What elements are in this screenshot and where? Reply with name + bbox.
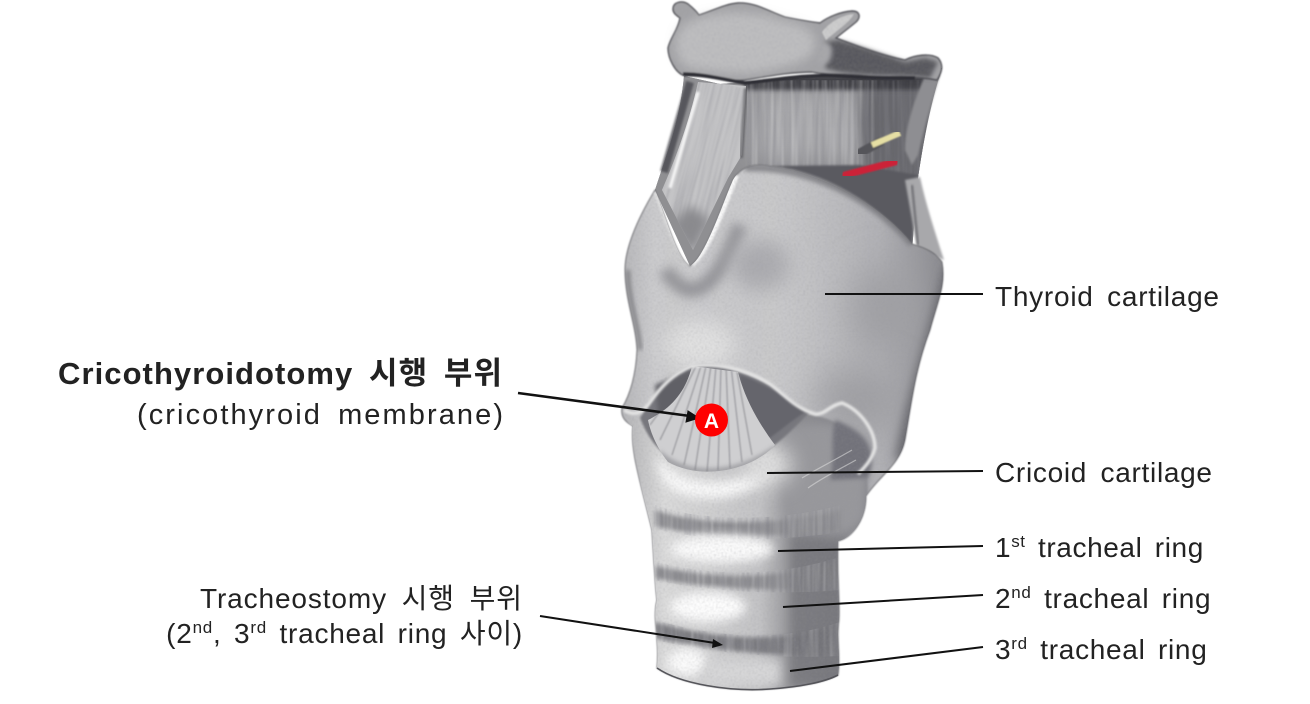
tracheal bands — [655, 510, 840, 536]
leader: 3rd tracheal ring — [790, 647, 983, 671]
leader: cricoid cartilage — [767, 471, 983, 473]
label: cricothyroidotomy site: Cricothyroidotomy 시행 부위 — [58, 356, 502, 391]
label: thyroid cartilage: Thyroid cartilage — [995, 281, 1219, 312]
thyroid notch rim — [691, 175, 736, 264]
label: cricoid cartilage: Cricoid cartilage — [995, 457, 1212, 488]
tracheal ring highlights — [670, 535, 774, 563]
cricothyroid membrane — [624, 360, 875, 488]
leader: 1st tracheal ring — [778, 546, 983, 551]
leader: 2nd tracheal ring — [783, 595, 983, 607]
label: between 2nd and 3rd tracheal rings: rd — [250, 618, 267, 637]
marker A: A — [704, 410, 719, 433]
label: 2nd tracheal ring: tracheal ring — [1032, 583, 1211, 614]
thyroid shading — [844, 269, 893, 348]
label: between 2nd and 3rd tracheal rings: tracheal ring 사이) — [267, 618, 523, 649]
label: 1st tracheal ring: tracheal ring — [1026, 532, 1204, 563]
leader: thyroid cartilage — [825, 293, 983, 295]
label: between 2nd and 3rd tracheal rings: nd — [193, 618, 213, 637]
arrow: to tracheostomy site — [540, 616, 723, 648]
label: between 2nd and 3rd tracheal rings: (2 — [166, 618, 193, 649]
icon: yellow nerve — [860, 133, 900, 153]
label: 3rd tracheal ring: rd — [1011, 634, 1028, 653]
label: 2nd tracheal ring: nd — [1011, 583, 1032, 602]
label: 1st tracheal ring: st — [1011, 532, 1026, 551]
right ligament and muscle strip — [905, 75, 940, 165]
label: 1st tracheal ring: 1 — [995, 532, 1011, 563]
thyroid lower rim — [624, 365, 875, 474]
icon: red artery — [845, 162, 895, 175]
upper thyrohyoid membrane — [655, 68, 945, 266]
cricoid highlight — [655, 455, 775, 499]
body: thyroid, cricoid, trachea — [620, 160, 960, 700]
label: 2nd tracheal ring: 2 — [995, 583, 1011, 614]
illustration: larynx and trachea — [620, 0, 960, 700]
arrow: to marker A — [518, 393, 699, 422]
label: tracheostomy site: Tracheostomy 시행 부위 — [200, 583, 522, 614]
label: cricothyroid membrane: (cricothyroid membrane) — [137, 399, 503, 431]
marker A — [695, 404, 728, 436]
hyoid bone — [668, 0, 943, 83]
label: 3rd tracheal ring: 3 — [995, 634, 1011, 665]
label: 3rd tracheal ring: tracheal ring — [1028, 634, 1207, 665]
cricoid and trachea base — [628, 410, 868, 700]
label: between 2nd and 3rd tracheal rings: , 3 — [213, 618, 250, 649]
